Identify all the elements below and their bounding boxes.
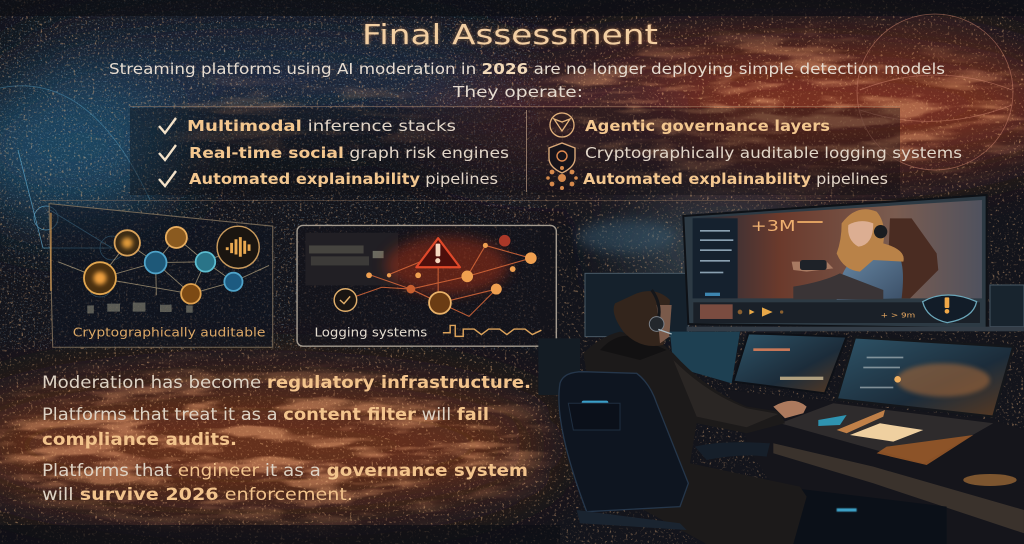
right list [546,113,962,190]
panel: logging systems alert network [297,225,556,346]
bottom stat: + > 9m [881,310,915,319]
item: social graph: Real-time social graph risk engines [189,144,509,162]
console shelf [687,327,1024,331]
starfield glow [577,220,677,253]
title: Final Assessment [362,18,658,51]
form block [305,233,398,285]
line: regulatory infrastructure: Moderation has become regulatory infrastructure. [42,373,531,393]
panel: capabilities list [40,106,962,201]
gold node [429,292,451,314]
icon: shield [549,143,575,173]
closing statement [42,373,531,505]
gaming chair [887,218,938,298]
desk [727,390,1024,544]
line: governance system: Platforms that engineer it as a governance system [42,461,528,481]
right monitor [837,337,1013,417]
icon: agentic badge [550,113,574,137]
back data panels [538,273,1024,395]
icon: warning triangle [416,238,460,267]
centre monitor [733,333,847,393]
check: multimodal [159,118,176,133]
intro sentence: Streaming platforms using AI moderation in 2026 are no longer deploying simple detection models [109,60,945,78]
check: social graph [159,145,176,160]
they operate line: They operate: [452,83,583,101]
item: explainability right: Automated explainability pipelines [583,170,888,188]
item: explainability: Automated explainability pipelines [189,170,498,188]
icon: alert shield [923,295,977,323]
chat lines [700,230,733,296]
playback controls [738,307,783,317]
item: cryptographic logging: Cryptographically auditable logging systems [585,144,962,162]
panel: cryptographically auditable network [49,204,273,347]
streamer [792,209,904,300]
alert links [345,245,531,316]
icon: signature waveform [443,325,541,336]
label: cryptographically auditable: Cryptographically auditable [73,324,266,339]
item: agentic: Agentic governance layers [585,117,830,135]
main stream monitor [683,195,987,328]
scene: control room operator [538,195,1024,544]
line: compliance audits: compliance audits. [42,430,237,450]
operator chair [559,372,770,530]
operator [583,290,807,544]
floor [753,483,947,544]
check: explainability [159,171,176,186]
alert nodes [366,235,537,295]
network links [58,237,269,295]
icon: network cluster [546,166,578,190]
video thumb [700,304,733,319]
globe: right network sphere [857,14,1013,170]
floor light [837,508,857,512]
globe: left network sphere [0,86,150,297]
item: multimodal: Multimodal inference stacks [187,117,456,135]
label: logging systems: Logging systems [315,324,427,339]
back monitor left [670,332,740,383]
stat dash [797,221,823,223]
network nodes [84,226,259,304]
line: content filter: Platforms that treat it as a content filter will fail [42,405,489,425]
small document icons [87,303,193,313]
red glow [385,236,509,295]
line: survive enforcement: will survive 2026 enforcement. [42,485,353,505]
left list [159,117,509,188]
player bar [693,302,980,323]
viewer stat: +3M [751,218,796,235]
check node [334,289,357,311]
